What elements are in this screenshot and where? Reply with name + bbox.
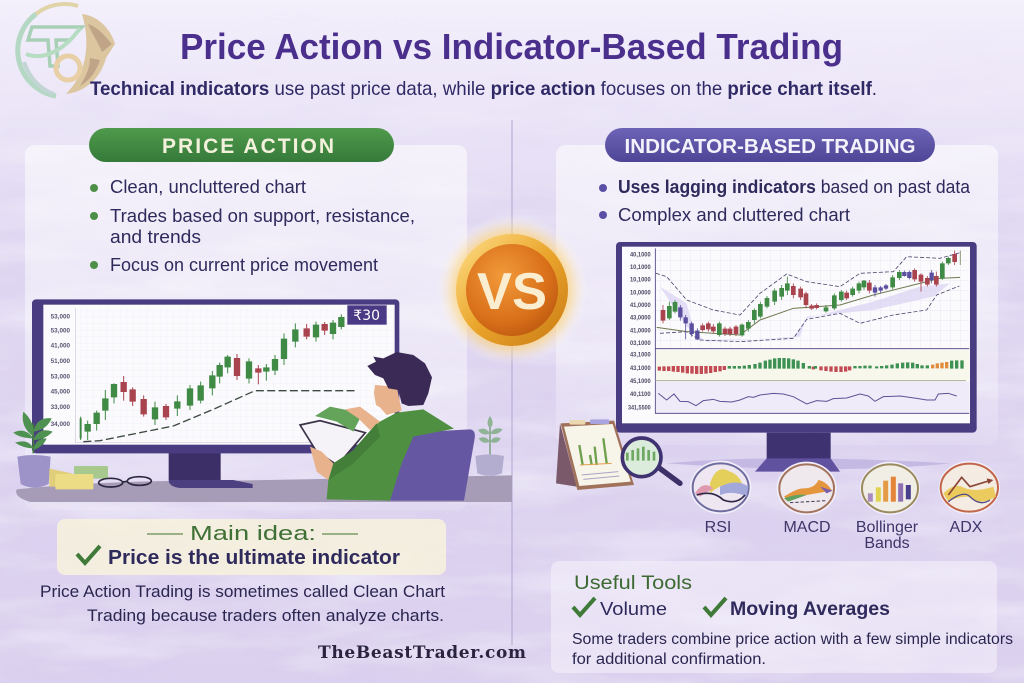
axis labels bbox=[628, 252, 651, 411]
bullet list: price action: and trends bbox=[110, 227, 201, 247]
icon: MACD bbox=[777, 462, 837, 515]
monitor: indicator chart bbox=[616, 242, 977, 433]
price axis labels: 34,000 bbox=[51, 421, 70, 428]
indicator labels: Bands bbox=[864, 535, 910, 552]
moving average bbox=[657, 277, 960, 335]
MACD histogram bbox=[659, 358, 962, 374]
neck and face bbox=[374, 385, 402, 415]
monitor: price action chart bbox=[32, 299, 399, 453]
useful tools heading: Useful Tools bbox=[574, 572, 692, 594]
axis labels: 40,1100 bbox=[630, 392, 651, 398]
bullet list: indicators: Complex and cluttered chart bbox=[618, 205, 850, 225]
main idea label: Main idea: bbox=[190, 523, 316, 545]
bullet list: price action: Focus on current price movement bbox=[110, 255, 378, 275]
useful tools note: Some traders combine price action with a few simple indicators bbox=[572, 631, 1013, 648]
check: moving averages: Moving Averages bbox=[730, 599, 890, 620]
price axis labels: 41,000 bbox=[51, 343, 70, 350]
axis labels: 10,0000 bbox=[630, 290, 651, 296]
glasses bbox=[99, 477, 151, 487]
axis labels: 45,1000 bbox=[630, 379, 651, 385]
logo bbox=[18, 4, 115, 96]
check: volume bbox=[573, 598, 667, 619]
price axis labels: 45,000 bbox=[51, 388, 70, 395]
useful tools note: for additional confirmation. bbox=[572, 651, 766, 668]
useful tools box bbox=[551, 561, 1013, 673]
price axis labels: 53,000 bbox=[51, 373, 70, 380]
price axis labels: 51,000 bbox=[51, 358, 70, 365]
indicator labels: ADX bbox=[950, 519, 983, 536]
indicator labels bbox=[705, 519, 983, 552]
potted plant left bbox=[13, 412, 53, 488]
axis labels: 43,1000 bbox=[630, 353, 651, 359]
desk shadow bbox=[667, 458, 950, 469]
hair bbox=[367, 352, 432, 406]
desk bbox=[16, 475, 512, 502]
price axis labels: 53,000 bbox=[51, 313, 70, 320]
subtitle: Technical indicators use past price data, while price action focuses on the price chart itself. bbox=[90, 78, 877, 100]
dashed trend line bbox=[83, 391, 357, 442]
price action note bbox=[40, 583, 445, 625]
monitor stand bbox=[755, 433, 840, 472]
monitor stand bbox=[169, 453, 253, 488]
title: Price Action vs Indicator-Based Trading bbox=[180, 26, 843, 67]
icon: Bollinger Bands bbox=[860, 462, 920, 515]
bullet list: indicators: Uses lagging indicators based on past data bbox=[618, 177, 971, 197]
axis labels: 43,1000 bbox=[630, 366, 651, 372]
potted plant right bbox=[475, 416, 504, 476]
price tag: ₹30 bbox=[353, 308, 380, 324]
bollinger bands bbox=[656, 253, 960, 342]
icon: ADX bbox=[939, 461, 1000, 514]
green cloth and hand bbox=[315, 407, 360, 432]
indicator labels: Bollinger bbox=[856, 519, 919, 536]
panel: price action bbox=[25, 128, 467, 510]
heading pill: indicator-based trading bbox=[605, 128, 935, 162]
bullet list: price action: Trades based on support, resistance, bbox=[110, 206, 415, 226]
axis labels: 10,1000 bbox=[630, 265, 651, 271]
VS coin: VS bbox=[477, 263, 547, 321]
price axis labels: 33,000 bbox=[51, 404, 70, 411]
price action note: Trading because traders often analyze charts. bbox=[87, 607, 444, 625]
heading pill: price action: PRICE ACTION bbox=[162, 135, 334, 158]
gold bars and book bbox=[49, 466, 108, 489]
check icon bbox=[77, 546, 100, 563]
price action note: Price Action Trading is sometimes called Clean Chart bbox=[40, 583, 445, 601]
check: volume: Volume bbox=[600, 598, 667, 619]
axis labels: 03,1000 bbox=[630, 341, 651, 347]
magnifying glass bbox=[622, 438, 680, 483]
axis labels: 41,0000 bbox=[630, 303, 651, 309]
icon: RSI bbox=[690, 461, 751, 514]
axis labels: 41,0000 bbox=[630, 328, 651, 334]
shirt bbox=[327, 409, 454, 501]
panel: indicator-based trading bbox=[556, 128, 998, 445]
clipboard with bar chart bbox=[556, 419, 634, 490]
axis labels: 10,1000 bbox=[630, 278, 651, 284]
indicator labels: RSI bbox=[705, 519, 731, 536]
bullet list: price action bbox=[90, 177, 415, 275]
heading pill: price action bbox=[89, 128, 394, 162]
bullet list: price action: Clean, uncluttered chart bbox=[110, 177, 306, 197]
VS coin bbox=[436, 214, 588, 366]
trader figure bbox=[300, 352, 475, 501]
axis labels: 341,5500 bbox=[628, 405, 651, 411]
illustration: trader at clean chart monitor bbox=[13, 299, 512, 502]
tablet bbox=[300, 421, 365, 465]
axis labels: 40,1000 bbox=[630, 252, 651, 258]
candlesticks bbox=[81, 314, 341, 440]
heading pill: indicator-based trading: INDICATOR-BASED TRADING bbox=[624, 136, 916, 158]
bullet list: indicators bbox=[599, 177, 971, 225]
price tag bbox=[347, 305, 387, 325]
chair bbox=[387, 429, 475, 501]
price axis labels: 53,000 bbox=[51, 328, 70, 335]
useful tools note bbox=[572, 631, 1013, 668]
main idea text: Price is the ultimate indicator bbox=[108, 546, 400, 569]
bollinger cloud bbox=[660, 283, 950, 342]
indicator labels: MACD bbox=[783, 519, 831, 536]
axis labels: 43,0000 bbox=[630, 316, 651, 322]
brand name: TheBeastTrader.com bbox=[318, 643, 526, 663]
main idea box bbox=[57, 519, 446, 575]
candlesticks bbox=[663, 251, 960, 340]
illustration: cluttered indicator monitor bbox=[556, 242, 1000, 515]
price axis labels bbox=[51, 313, 70, 428]
RSI line bbox=[658, 393, 957, 406]
